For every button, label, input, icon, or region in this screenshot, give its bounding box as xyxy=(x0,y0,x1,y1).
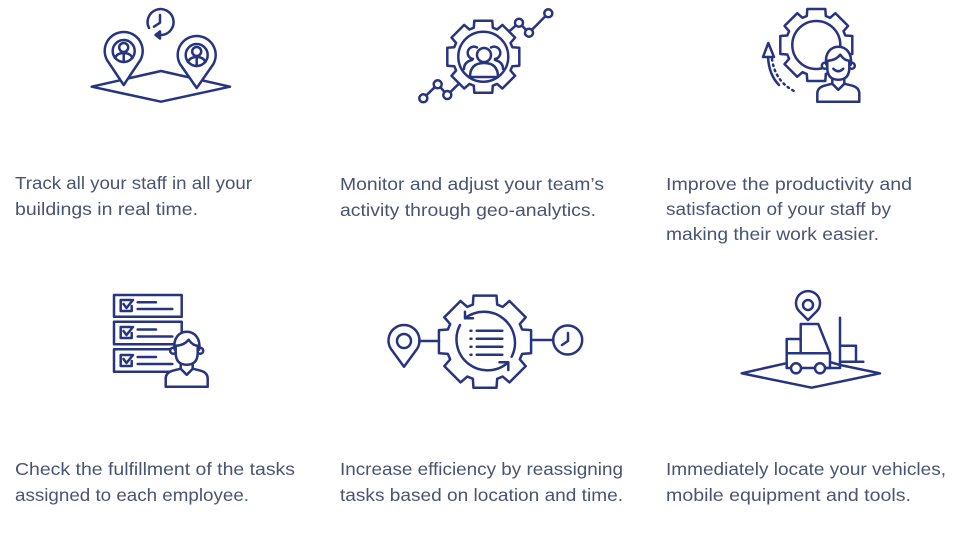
text: track staff: buildings in real time. xyxy=(15,199,198,219)
icon: map with two staff pins and clock xyxy=(92,9,230,102)
text: task fulfillment: assigned to each employee. xyxy=(15,485,249,505)
icon: forklift with location pin xyxy=(742,291,880,388)
icon: gear, worker and rising arrow xyxy=(763,9,859,102)
panel: task fulfillment xyxy=(15,295,295,505)
text: task fulfillment xyxy=(15,459,295,505)
text: locate vehicles: mobile equipment and tools. xyxy=(666,485,911,505)
text: track staff xyxy=(15,173,252,219)
text: reassign tasks xyxy=(340,459,623,505)
panel: reassign tasks xyxy=(340,296,623,505)
text: locate vehicles xyxy=(666,459,946,505)
text: task fulfillment: Check the fulfillment of the tasks xyxy=(15,459,295,479)
text: productivity xyxy=(666,174,912,244)
text: reassign tasks: tasks based on location and time. xyxy=(340,485,623,505)
text: geo-analytics: activity through geo-analytics. xyxy=(340,200,596,220)
icon: pin, gear with task list and clock xyxy=(388,296,582,388)
panel: track staff xyxy=(15,9,252,219)
text: geo-analytics: Monitor and adjust your team’s xyxy=(340,174,604,194)
panel: locate vehicles xyxy=(666,291,946,505)
icon: checklist and employee xyxy=(114,295,208,387)
text: productivity: Improve the productivity and xyxy=(666,174,912,194)
text: locate vehicles: Immediately locate your vehicles, xyxy=(666,459,946,479)
panel: geo-analytics xyxy=(340,9,604,220)
text: reassign tasks: Increase efficiency by reassigning xyxy=(340,459,623,479)
panel: productivity xyxy=(666,9,912,244)
text: track staff: Track all your staff in all your xyxy=(15,173,252,193)
icon: gear with team and line graph xyxy=(419,9,552,102)
text: productivity: making their work easier. xyxy=(666,224,879,244)
text: productivity: satisfaction of your staff by xyxy=(666,199,891,219)
text: geo-analytics xyxy=(340,174,604,220)
